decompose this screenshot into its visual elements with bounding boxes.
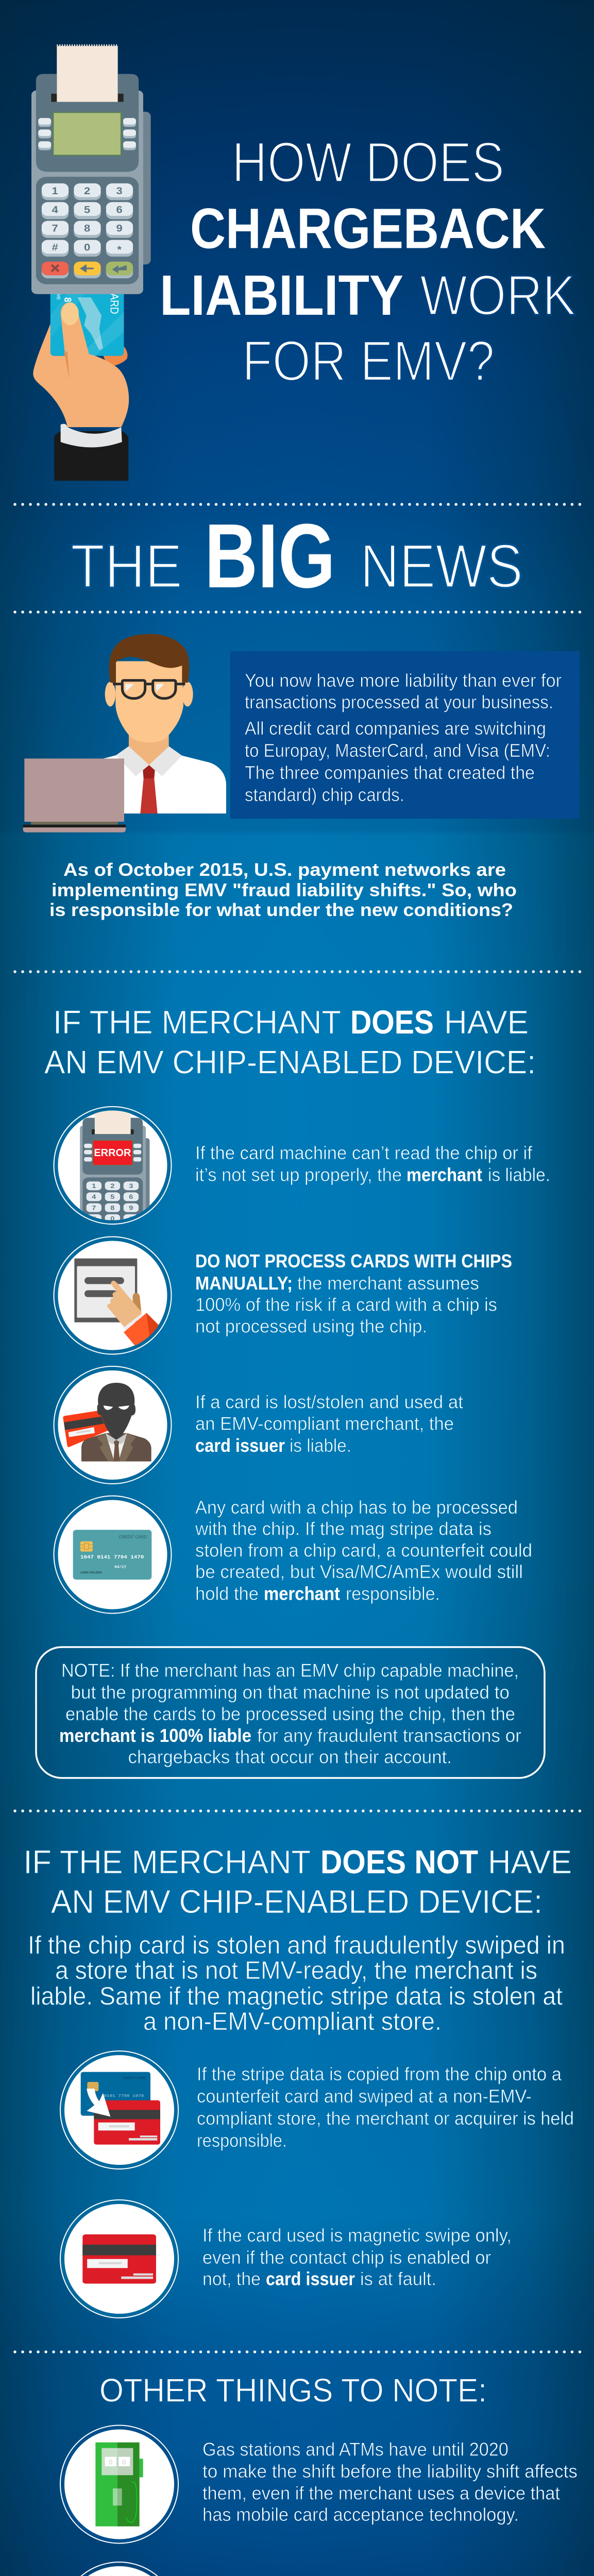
icon: error terminal circle: 9 xyxy=(129,1205,133,1211)
keypad: 6 xyxy=(116,205,123,215)
keypad: 0 xyxy=(84,242,90,253)
text: stripe data copied: counterfeit card and swiped at a non-EMV- xyxy=(197,2086,532,2107)
suit sleeve xyxy=(54,431,128,481)
icon: error terminal circle: * xyxy=(130,1215,133,1222)
callout: note: NOTE: If the merchant has an EMV chip capable machine, xyxy=(61,1660,519,1681)
text: magnetic swipe only: is at fault. xyxy=(360,2268,436,2290)
heading: merchant does have device: AN EMV CHIP-ENABLED DEVICE: xyxy=(44,1044,536,1081)
hand and thumb xyxy=(33,302,129,427)
heading: the big news xyxy=(71,505,523,607)
icon: error terminal circle: 8 xyxy=(110,1205,115,1211)
panel: liability text box: The three companies that created the xyxy=(245,762,535,783)
collar xyxy=(116,746,182,776)
text: stolen chip card paragraph: If the chip card is stolen and fraudulently swiped in xyxy=(28,1931,565,1959)
text: gas stations and atms xyxy=(202,2439,578,2525)
text: chip must be processed with chip: stolen from a chip card, a counterfeit could xyxy=(195,1539,532,1561)
tie xyxy=(140,765,158,814)
heading: the big news: BIG xyxy=(205,505,335,607)
keypad: 5 xyxy=(84,205,90,215)
text: stripe data copied: compliant store, the merchant or acquirer is held xyxy=(197,2108,574,2129)
icon: copied stripe data circle: CREDIT CARD xyxy=(123,2077,146,2080)
icon: error terminal circle: 1 xyxy=(92,1182,96,1190)
heading: merchant does have device xyxy=(44,1004,536,1081)
text: stolen chip card paragraph xyxy=(28,1931,565,2036)
text: magnetic swipe only: card issuer xyxy=(266,2268,355,2290)
icon: magnetic stripe card circle xyxy=(60,2199,179,2318)
text: do not process manually xyxy=(195,1250,512,1336)
title: LIABILITY xyxy=(160,264,403,327)
text: chip must be processed with chip: merchant xyxy=(264,1583,340,1604)
icon: gas pump circle: 0 xyxy=(122,2459,126,2466)
heading: merchant does not have device: IF THE MERCHANT xyxy=(24,1843,311,1880)
shirt cuff xyxy=(61,424,122,447)
icon: error terminal circle: ERROR xyxy=(94,1146,131,1159)
keypad xyxy=(36,177,139,284)
heading: merchant does not have device: AN EMV CHIP-ENABLED DEVICE: xyxy=(51,1883,542,1920)
callout: note: but the programming on that machine is not updated to xyxy=(71,1682,510,1703)
keypad: 9 xyxy=(116,223,123,234)
icon: error terminal circle xyxy=(54,1106,172,1233)
keypad: 1 xyxy=(52,185,58,197)
question text xyxy=(49,860,517,920)
icon: gas pump circle xyxy=(60,2425,179,2544)
heading: merchant does have device: IF THE MERCHANT xyxy=(53,1004,341,1041)
icon: error terminal circle: 3 xyxy=(129,1182,133,1190)
icon: error terminal circle: 7 xyxy=(92,1205,96,1211)
icon: thief with stolen card circle xyxy=(54,1366,172,1484)
credit card in hand: ME xyxy=(56,294,61,300)
callout: note: for any fraudulent transactions or xyxy=(257,1725,521,1746)
neck xyxy=(129,732,169,765)
hair xyxy=(109,634,189,683)
callout: note: chargebacks that occur on their account. xyxy=(128,1747,452,1767)
icon: gas pump circle: 0 xyxy=(109,2459,112,2466)
text: do not process manually: 100% of the risk if a card with a chip is xyxy=(195,1294,497,1315)
glasses xyxy=(113,681,185,699)
icon: manual entry hand circle xyxy=(54,1236,172,1355)
text: lost or stolen card: card issuer xyxy=(195,1435,285,1456)
text: card machine cannot read chip: If the card machine can’t read the chip or if xyxy=(195,1142,533,1163)
text: magnetic swipe only xyxy=(202,2225,512,2290)
text: chip must be processed with chip: Any card with a chip has to be processed xyxy=(195,1497,518,1518)
side buttons xyxy=(38,118,136,150)
icon: monitor with money circle xyxy=(60,2562,179,2576)
panel: liability text box: You now have more liability than ever for xyxy=(245,670,562,691)
callout: note xyxy=(36,1647,545,1778)
text: do not process manually: MANUALLY; xyxy=(195,1273,293,1294)
terminal head xyxy=(36,74,139,172)
text: stripe data copied: If the stripe data is copied from the chip onto a xyxy=(197,2063,562,2084)
text: card machine cannot read chip: it’s not set up properly, the xyxy=(195,1164,402,1185)
heading: merchant does have device: DOES xyxy=(350,1004,434,1041)
callout: note: enable the cards to be processed using the chip, then the xyxy=(65,1703,515,1724)
panel: liability text box: standard) chip cards. xyxy=(245,784,404,805)
text: chip must be processed with chip xyxy=(195,1497,532,1604)
text: lost or stolen card xyxy=(195,1391,463,1456)
terminal screen xyxy=(53,112,121,156)
text: magnetic swipe only: If the card used is magnetic swipe only, xyxy=(202,2225,512,2246)
question text: implementing EMV "fraud liability shifts." So, who xyxy=(52,880,517,901)
heading: the big news: THE xyxy=(71,532,182,601)
icon: error terminal circle: 4 xyxy=(92,1193,96,1200)
title: CHARGEBACK xyxy=(190,197,546,261)
receipt paper xyxy=(57,45,118,102)
title xyxy=(160,131,576,393)
icon: error terminal circle: # xyxy=(92,1215,96,1222)
icon: chip credit card circle xyxy=(54,1495,172,1614)
keypad: # xyxy=(52,242,58,253)
text: magnetic swipe only: even if the contact chip is enabled or xyxy=(202,2247,491,2268)
icon: payment terminal with hand and card xyxy=(31,45,151,481)
text: lost or stolen card: is liable. xyxy=(290,1435,351,1456)
face xyxy=(105,661,193,742)
illustration: businessman with laptop xyxy=(23,634,226,833)
question text: is responsible for what under the new conditions? xyxy=(49,900,513,920)
icon: chip credit card circle: CARD HOLDER xyxy=(80,1571,102,1574)
panel: liability text box: transactions processed at your business. xyxy=(245,691,553,713)
question text: As of October 2015, U.S. payment networks are xyxy=(63,860,506,880)
text: chip must be processed with chip: hold the xyxy=(195,1583,259,1604)
text: card machine cannot read chip: is liable. xyxy=(488,1164,550,1185)
heading: merchant does have device: HAVE xyxy=(444,1004,529,1041)
keypad: * xyxy=(117,244,122,256)
text: chip must be processed with chip: be created, but Visa/MC/AmEx would still xyxy=(195,1561,523,1582)
text: stripe data copied: responsible. xyxy=(197,2130,287,2151)
text: card machine cannot read chip: merchant xyxy=(406,1164,482,1185)
icon: copied stripe data circle xyxy=(60,2050,179,2170)
credit card in hand: CARD xyxy=(108,286,121,314)
text: gas stations and atms: has mobile card acceptance technology. xyxy=(202,2504,519,2525)
heading: other things to note: OTHER THINGS TO NOTE: xyxy=(99,2372,487,2409)
credit card in hand xyxy=(50,286,124,356)
panel: liability text box: to Europay, MasterCard, and Visa (EMV: xyxy=(245,740,550,761)
icon: error terminal circle: 5 xyxy=(110,1193,115,1200)
panel: liability text box: All credit card companies are switching xyxy=(245,718,546,739)
keypad: 2 xyxy=(84,185,90,197)
heading: the big news: NEWS xyxy=(360,532,523,601)
text: stolen chip card paragraph: a non-EMV-compliant store. xyxy=(143,2008,442,2036)
text: lost or stolen card: If a card is lost/stolen and used at xyxy=(195,1391,463,1413)
credit card in hand: 8 xyxy=(62,297,73,302)
icon: chip credit card circle: 04/17 xyxy=(114,1566,126,1570)
icon: error terminal circle: 0 xyxy=(110,1215,114,1222)
shirt xyxy=(101,755,226,814)
text: do not process manually: not processed using the chip. xyxy=(195,1316,427,1336)
keypad: 4 xyxy=(52,205,58,215)
heading: merchant does not have device: DOES NOT xyxy=(320,1843,478,1880)
text: card machine cannot read chip xyxy=(195,1142,550,1185)
icon: copied stripe data circle: 0191 7709 1970 xyxy=(104,2094,144,2098)
icon: error terminal circle: 6 xyxy=(129,1193,133,1200)
text: stolen chip card paragraph: a store that is not EMV-ready, the merchant is xyxy=(55,1957,537,1985)
text: do not process manually: DO NOT PROCESS CARDS WITH CHIPS xyxy=(195,1250,512,1272)
laptop xyxy=(23,758,126,833)
callout: note: merchant is 100% liable xyxy=(59,1725,251,1746)
heading: merchant does not have device: HAVE xyxy=(488,1843,572,1880)
text: gas stations and atms: Gas stations and ATMs have until 2020 xyxy=(202,2439,508,2460)
text: lost or stolen card: an EMV-compliant merchant, the xyxy=(195,1413,454,1434)
text: stolen chip card paragraph: liable. Same if the magnetic stripe data is stolen at xyxy=(30,1982,563,2010)
icon: chip credit card circle: CREDIT CARD xyxy=(119,1535,147,1539)
text: gas stations and atms: to make the shift before the liability shift affects xyxy=(202,2461,578,2482)
text: do not process manually: the merchant assumes xyxy=(297,1273,479,1294)
panel: liability text box xyxy=(230,651,580,819)
title: FOR EMV? xyxy=(242,330,495,393)
text: stripe data copied xyxy=(197,2063,574,2151)
keypad: 7 xyxy=(52,223,58,234)
terminal body xyxy=(31,90,143,294)
icon: error terminal circle: 2 xyxy=(110,1182,114,1190)
keypad: 3 xyxy=(116,185,123,197)
heading: merchant does not have device xyxy=(24,1843,572,1920)
title: WORK xyxy=(420,264,576,327)
icon: chip credit card circle: 1047 0141 7704 1470 xyxy=(80,1554,144,1560)
terminal side grip xyxy=(137,112,151,264)
text: chip must be processed with chip: with the chip. If the mag stripe data is xyxy=(195,1518,491,1539)
hand back finger xyxy=(103,344,128,367)
arrow xyxy=(87,2089,110,2116)
text: gas stations and atms: them, even if the merchant uses a device that xyxy=(202,2482,560,2504)
text: magnetic swipe only: not, the xyxy=(202,2268,261,2290)
title: HOW DOES xyxy=(232,131,504,194)
text: chip must be processed with chip: responsible. xyxy=(346,1583,440,1604)
keypad: 8 xyxy=(84,223,90,234)
